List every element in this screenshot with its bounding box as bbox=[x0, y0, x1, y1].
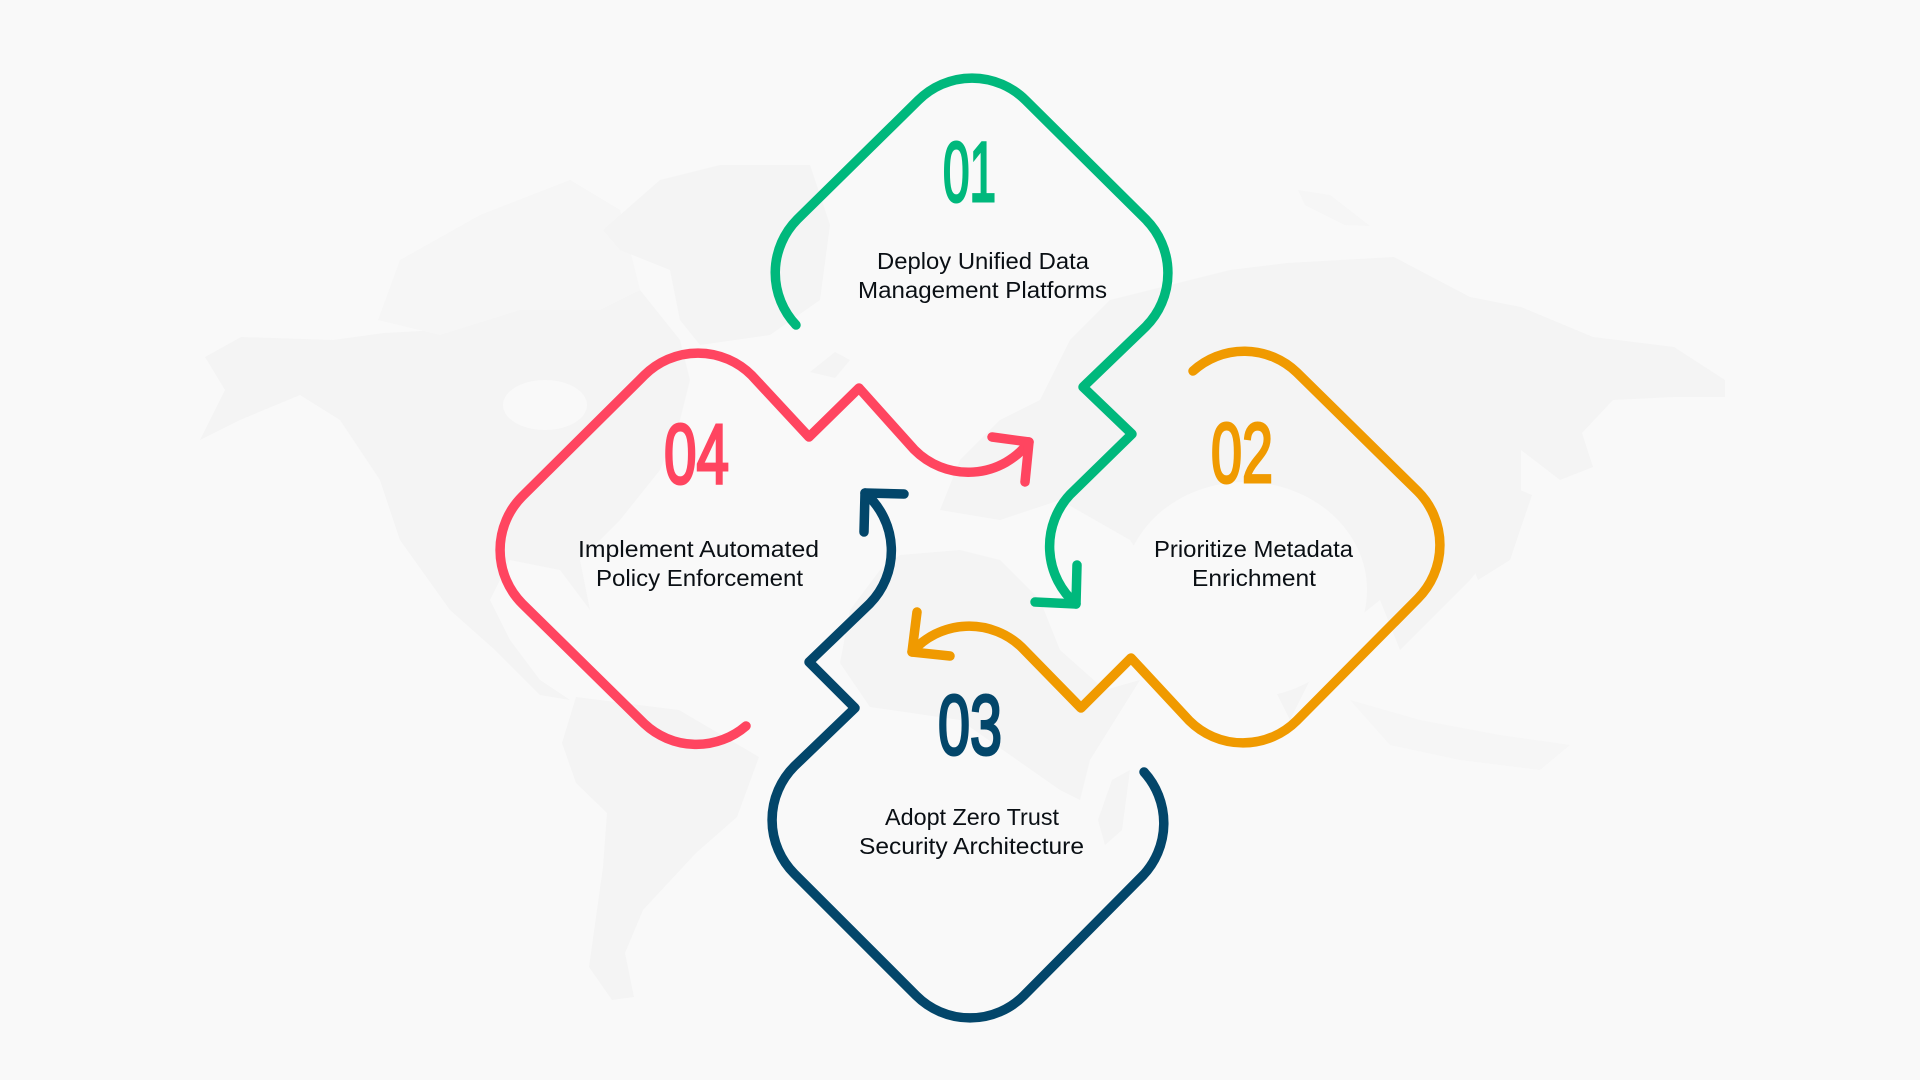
step 01 outline with arrow bbox=[775, 78, 1168, 604]
number 01: 01 bbox=[943, 125, 996, 219]
number 02: 02 bbox=[1211, 406, 1273, 500]
world map background bbox=[200, 165, 1725, 1000]
step 03 label: Security Architecture bbox=[859, 833, 1084, 859]
step 04 label: Implement Automated bbox=[578, 536, 819, 562]
number 04: 04 bbox=[664, 407, 729, 501]
step 02 label: Prioritize Metadata bbox=[1154, 536, 1353, 562]
step 02 label bbox=[1154, 536, 1353, 591]
step 01 label: Management Platforms bbox=[858, 277, 1107, 303]
lighter patches bbox=[1123, 482, 1367, 698]
step 04 label: Policy Enforcement bbox=[596, 565, 804, 591]
step 03 label bbox=[859, 804, 1084, 859]
step 04 outline with arrow bbox=[500, 353, 1029, 744]
step 03 outline with arrow bbox=[772, 493, 1164, 1018]
number 03: 03 bbox=[938, 678, 1002, 772]
step 01 label bbox=[858, 248, 1107, 303]
step 03 label: Adopt Zero Trust bbox=[885, 804, 1060, 830]
step 01 label: Deploy Unified Data bbox=[877, 248, 1089, 274]
step 02 outline with arrow bbox=[912, 351, 1440, 743]
step 02 label: Enrichment bbox=[1192, 565, 1317, 591]
step 04 label bbox=[578, 536, 819, 591]
